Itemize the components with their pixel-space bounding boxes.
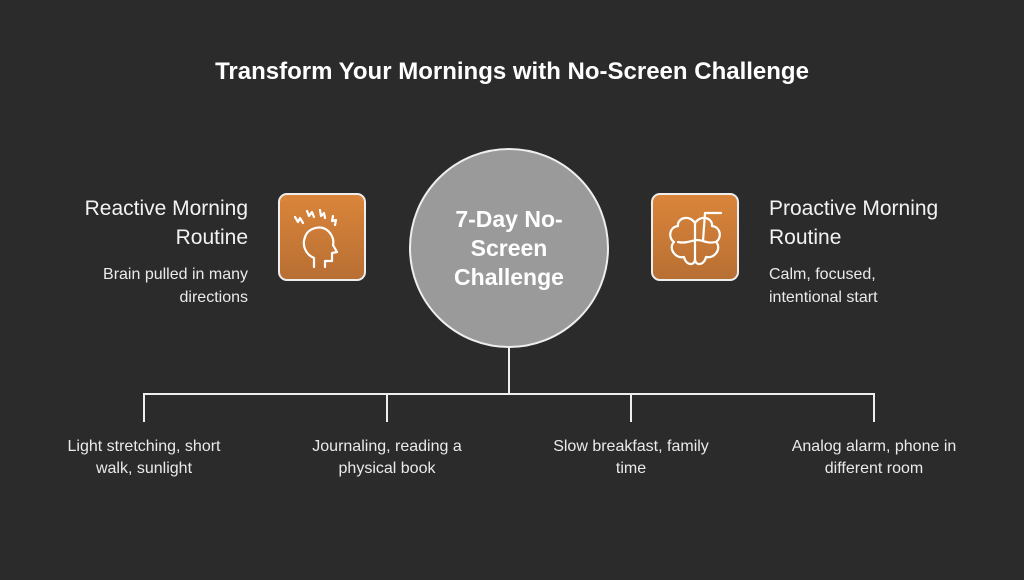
right subtext: Calm, focused, (769, 266, 876, 283)
center circle: Screen (471, 234, 547, 260)
bottom item 2: Journaling, reading a physical book (312, 438, 462, 477)
title: Transform Your Mornings with No-Screen Challenge (215, 58, 809, 85)
center circle: 7-Day No- (455, 206, 563, 232)
right heading: Proactive Morning (769, 197, 938, 220)
right subtext: intentional start (769, 289, 878, 306)
right heading: Routine (769, 226, 841, 249)
left subtext: directions (180, 289, 248, 306)
right subtext (769, 266, 878, 306)
center circle (409, 148, 609, 348)
left heading (85, 197, 248, 249)
center circle: Challenge (454, 264, 564, 290)
left heading: Reactive Morning (85, 197, 248, 220)
bottom item 4: Analog alarm, phone in different room (792, 438, 956, 477)
right heading (769, 197, 938, 249)
left subtext: Brain pulled in many (103, 266, 248, 283)
icon: stressed head (278, 193, 366, 281)
left subtext (103, 266, 248, 306)
bottom item 3: Slow breakfast, family time (553, 438, 709, 477)
left heading: Routine (176, 226, 248, 249)
icon: calm brain (651, 193, 739, 281)
bottom item 1: Light stretching, short walk, sunlight (68, 438, 220, 477)
